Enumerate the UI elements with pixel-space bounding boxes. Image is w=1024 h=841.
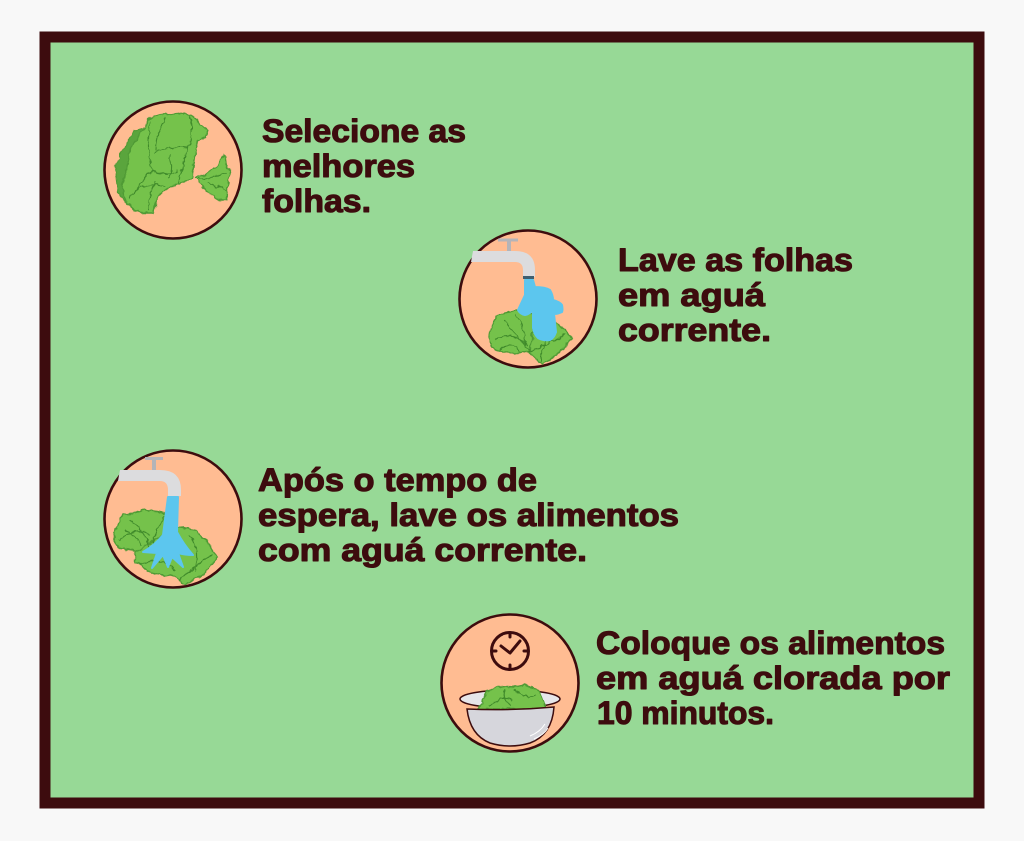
icon: bowl bbox=[460, 685, 560, 746]
icon: lettuce leaves in circle bbox=[104, 102, 242, 238]
text: step 3: Após o tempo de bbox=[258, 462, 537, 498]
text: step 2: em aguá bbox=[618, 277, 765, 313]
step 2: wash under running water bbox=[460, 230, 853, 368]
step 1: select leaves bbox=[104, 102, 466, 238]
text: step 4 bbox=[596, 625, 950, 731]
text: step 1: melhores bbox=[262, 148, 415, 184]
text: step 4: Coloque os alimentos bbox=[596, 625, 945, 661]
step 4: soak in chlorinated water bbox=[442, 614, 950, 752]
text: step 2: Lave as folhas bbox=[618, 242, 853, 278]
text: step 2 bbox=[618, 242, 853, 348]
text: step 4: 10 minutos. bbox=[597, 695, 774, 731]
text: step 3: com aguá corrente. bbox=[258, 532, 587, 568]
icon: clock and bowl with lettuce bbox=[442, 614, 578, 752]
text: step 3 bbox=[258, 462, 679, 568]
text: step 4: em aguá clorada por bbox=[596, 660, 950, 696]
icon: faucet over lettuce bbox=[460, 230, 596, 368]
step 3: rinse after waiting bbox=[104, 450, 679, 588]
text: step 1 bbox=[262, 113, 466, 219]
text: step 1: folhas. bbox=[262, 183, 371, 219]
text: step 1: Selecione as bbox=[262, 113, 466, 149]
icon: faucet rinsing lettuce bbox=[104, 450, 242, 588]
icon: clock bbox=[492, 632, 528, 670]
text: step 3: espera, lave os alimentos bbox=[258, 497, 679, 533]
text: step 2: corrente. bbox=[618, 312, 771, 348]
